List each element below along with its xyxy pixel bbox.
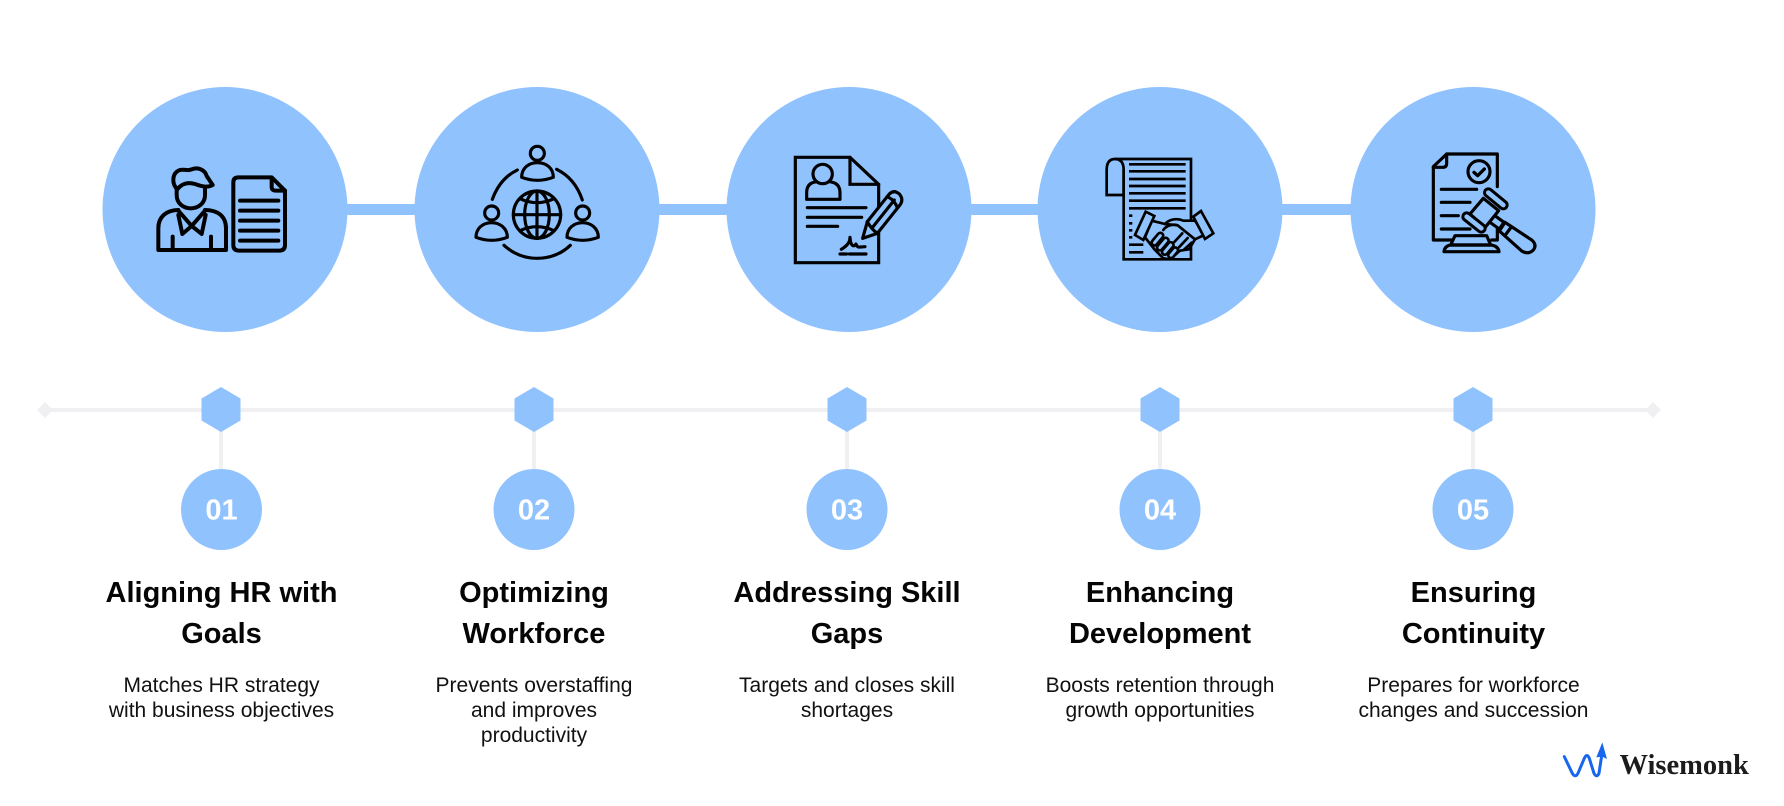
icon circle 1: HR person with document xyxy=(102,87,348,332)
hexagon 3 xyxy=(828,387,866,432)
connector bars between icon circles xyxy=(340,204,1360,215)
heading: Workforce xyxy=(463,618,605,650)
hexagon 1 xyxy=(202,387,240,432)
description: Boosts retention through xyxy=(1046,674,1274,697)
description: with business objectives xyxy=(108,699,334,722)
number badge 02: 02 xyxy=(518,494,550,526)
icon: people around globe xyxy=(476,146,598,258)
description: and improves xyxy=(471,699,597,722)
heading: Addressing Skill xyxy=(733,577,961,609)
hexagon 5 xyxy=(1454,387,1492,432)
number badge 02 xyxy=(494,469,574,550)
step 2 marker xyxy=(494,387,574,550)
icon circle 2: global workforce xyxy=(414,87,660,332)
heading: Gaps xyxy=(811,618,883,650)
description: growth opportunities xyxy=(1065,699,1255,722)
description: Prepares for workforce xyxy=(1367,674,1580,697)
logo mark: wave with arrow xyxy=(1564,742,1607,776)
heading: Ensuring xyxy=(1411,577,1536,609)
step 5 text xyxy=(1358,577,1588,722)
step 2 text xyxy=(436,577,632,747)
heading: Continuity xyxy=(1402,618,1545,650)
icon: document with pencil xyxy=(795,157,902,263)
number badge 03: 03 xyxy=(831,494,863,526)
number badge 05: 05 xyxy=(1457,494,1489,526)
timeline axis with end diamonds xyxy=(37,402,1661,418)
number badge 01 xyxy=(181,469,262,550)
description: Targets and closes skill xyxy=(739,674,955,697)
hexagon 2 xyxy=(514,387,554,432)
description: Prevents overstaffing xyxy=(436,674,632,697)
heading: Optimizing xyxy=(459,577,609,609)
description: changes and succession xyxy=(1358,699,1588,722)
heading: Aligning HR with xyxy=(106,577,337,609)
step 3 text xyxy=(733,577,961,722)
step 1 marker xyxy=(181,387,262,550)
icon circle 3: signed resume xyxy=(726,87,972,332)
number badge 05 xyxy=(1432,469,1514,550)
description: productivity xyxy=(481,724,588,747)
icon: scroll contract with handshake xyxy=(1107,159,1213,259)
number badge 04: 04 xyxy=(1144,494,1176,526)
heading: Enhancing xyxy=(1086,577,1234,609)
number badge 01: 01 xyxy=(205,494,238,526)
heading: Goals xyxy=(181,618,262,650)
hexagon 4 xyxy=(1140,387,1180,432)
icon circle 5: legal compliance xyxy=(1350,87,1596,332)
icon circle 4: agreement handshake xyxy=(1038,87,1282,332)
step 4 text xyxy=(1046,577,1274,722)
heading: Development xyxy=(1069,618,1251,650)
step 4 marker xyxy=(1120,387,1200,550)
step 5 marker xyxy=(1432,387,1514,550)
description: Matches HR strategy xyxy=(123,674,320,697)
logo wordmark: Wisemonk xyxy=(1620,750,1749,781)
step 1 text xyxy=(106,577,337,722)
icon: person and document xyxy=(158,168,285,251)
description: shortages xyxy=(801,699,893,722)
number badge 03 xyxy=(806,469,888,550)
icon: document with gavel xyxy=(1433,154,1535,253)
number badge 04 xyxy=(1120,469,1200,550)
Wisemonk logo xyxy=(1564,742,1749,781)
step 3 marker xyxy=(806,387,888,550)
